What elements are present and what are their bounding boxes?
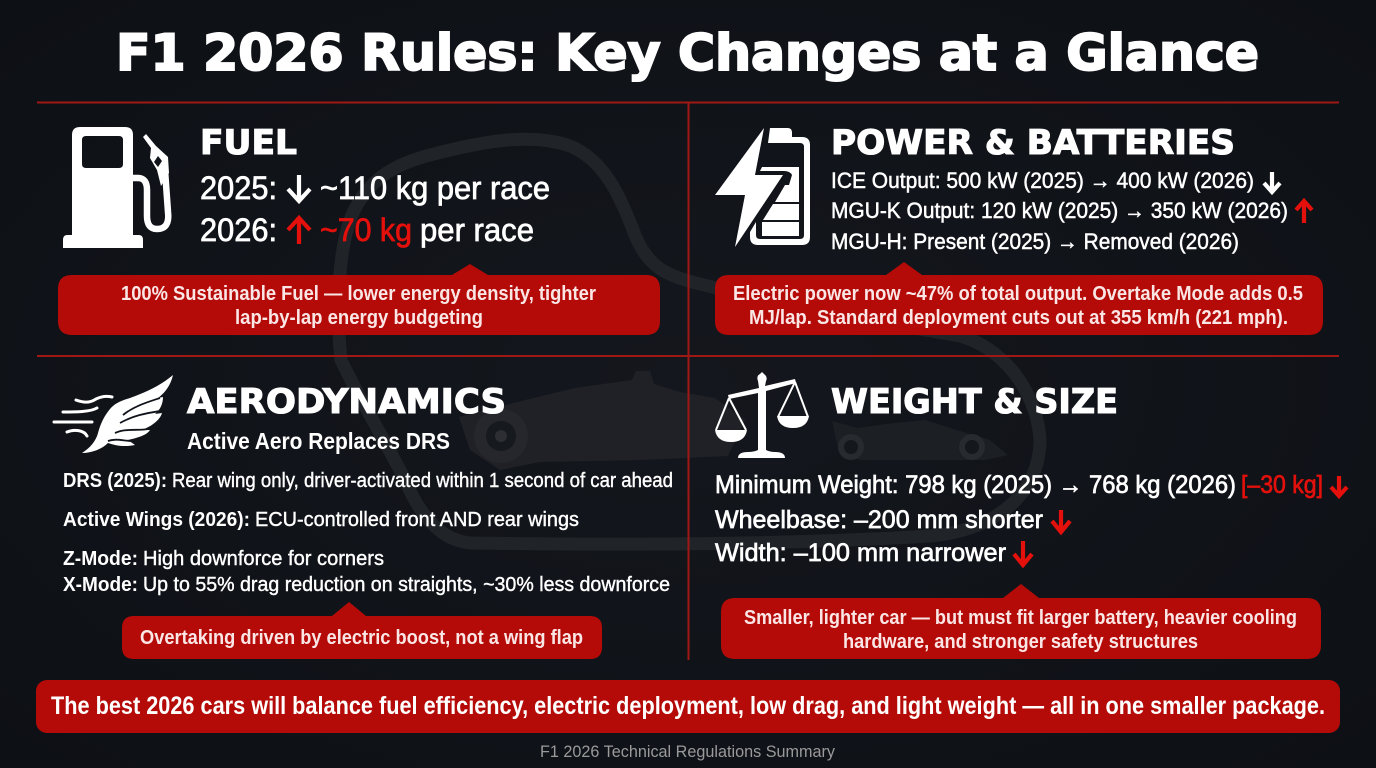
panel: fuel [58, 123, 660, 335]
text: Z-mode: High downforce for corners [143, 547, 384, 570]
heading: aerodynamics: AERODYNAMICS [187, 382, 506, 422]
text: 2025 fuel figure: ~110 kg per race [320, 170, 550, 206]
panel: aerodynamics [54, 375, 673, 659]
callout: smaller lighter car [721, 584, 1321, 659]
callout: sustainable fuel: lap-by-lap energy budgeting [235, 307, 483, 329]
text: X-mode: X-Mode: [63, 573, 138, 596]
icon: battery with lightning bolt [715, 128, 810, 247]
text: active wings 2026: Active Wings (2026): [63, 508, 250, 531]
text: wheelbase: Wheelbase: –200 mm shorter [715, 506, 1043, 534]
heading: power and batteries: POWER & BATTERIES [831, 123, 1235, 163]
callout: smaller lighter car: Smaller, lighter car — but must fit larger battery, heavier cooling [744, 607, 1297, 629]
callout: overtaking: Overtaking driven by electric boost, not a wing flap [140, 627, 583, 649]
text: 2026 fuel figure: per race [420, 212, 534, 248]
icon: balance scales [715, 372, 809, 458]
text: 2025 fuel figure: 2025: [200, 170, 277, 206]
text: 2025 fuel figure [200, 170, 550, 206]
watermark: racetrack outline [339, 139, 1040, 544]
summary banner [36, 680, 1340, 733]
icon: wing with wind lines [54, 375, 173, 453]
text: width: Width: –100 mm narrower [715, 539, 1006, 567]
callout: smaller lighter car: hardware, and stronger safety structures [843, 631, 1198, 653]
text: 2026 fuel figure: 2026: [200, 212, 277, 248]
text: active wings 2026 [63, 508, 579, 531]
text: MGU-K output: MGU-K Output: 120 kW (2025) → 350 kW (2026) [831, 198, 1288, 223]
grid dividers [37, 102, 1339, 660]
callout: electric power [715, 262, 1323, 335]
text: X-mode: Up to 55% drag reduction on straights, ~30% less downforce [143, 573, 670, 596]
panel: weight and size [715, 372, 1347, 659]
heading: fuel: FUEL [200, 123, 297, 163]
text: ICE output: ICE Output: 500 kW (2025) → 400 kW (2026) [831, 168, 1254, 193]
text: 2026 fuel figure: ~70 kg [320, 212, 412, 248]
heading: weight and size: WEIGHT & SIZE [831, 382, 1118, 422]
panel: power and batteries [715, 123, 1323, 335]
text: minimum weight: Minimum Weight: 798 kg (2025) → 768 kg (2026) [715, 471, 1236, 499]
footer: F1 2026 Technical Regulations Summary [540, 743, 836, 761]
callout: electric power: Electric power now ~47% of total output. Overtake Mode adds 0.5 [733, 283, 1303, 305]
text: DRS 2025: Rear wing only, driver-activated within 1 second of car ahead [172, 469, 673, 492]
title: F1 2026 Rules: Key Changes at a Glance [116, 24, 1259, 82]
text: MGU-H: MGU-H: Present (2025) → Removed (2026) [831, 229, 1239, 254]
callout: electric power: MJ/lap. Standard deployment cuts out at 355 km/h (221 mph). [749, 307, 1288, 329]
text: 2026 fuel figure [200, 212, 534, 248]
text: active wings 2026: ECU-controlled front AND rear wings [255, 508, 579, 531]
callout: sustainable fuel [58, 264, 660, 335]
text: minimum weight: [–30 kg] [1241, 471, 1323, 499]
watermark: large car silhouette [459, 371, 745, 470]
watermark: small car silhouette [832, 420, 1008, 460]
icon: fuel pump [63, 127, 169, 248]
callout: sustainable fuel: 100% Sustainable Fuel — lower energy density, tighter [121, 283, 596, 305]
callout: overtaking [122, 602, 602, 659]
subheading: active aero: Active Aero Replaces DRS [187, 428, 450, 454]
text: Z-mode: Z-Mode: [63, 547, 138, 570]
text: DRS 2025: DRS (2025): [63, 469, 167, 492]
